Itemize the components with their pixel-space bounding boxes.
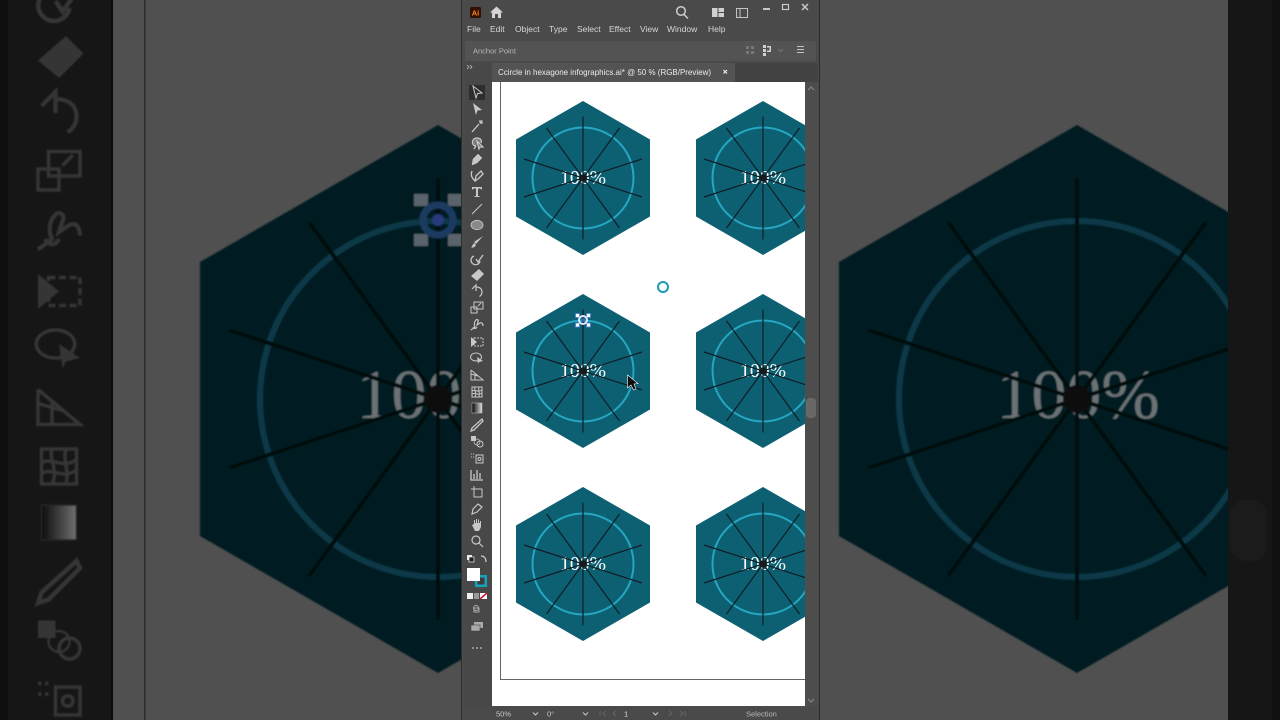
icon: zoom tool [472,536,483,547]
menu bar: Object [515,24,540,34]
icon: paintbrush tool [471,236,483,248]
selection handles on spoke [576,314,590,327]
left background: enlarged dimmed toolbar [36,0,84,715]
scrollbar arrows [808,87,814,702]
icon: perspective grid tool [471,370,483,380]
right background: enlarged dimmed hexagon: 100% [996,357,1160,434]
hexagon row 2 left [516,294,650,448]
icon: stroke swatch [475,575,487,587]
hexagon row 1 left [516,101,650,255]
toolbar panel [467,85,487,649]
icon: artboard tool [471,486,482,497]
icon: home [490,6,503,18]
hexagon row 2 right [696,294,805,448]
title bar icons [470,4,808,18]
menu bar: Effect [609,24,631,34]
status bar: Selection [746,710,777,718]
menu bar: File [467,24,481,34]
icon: eyedropper tool [471,419,483,431]
icon: app logo: Ai [472,8,479,18]
hexagon row 3 left: 100% [560,553,606,575]
icon: hand tool [472,519,481,531]
hexagon row 3 left [516,487,650,641]
hexagon row 1 right: 100% [740,167,786,189]
icon: selection tool [473,86,482,98]
status bar: 50% [496,710,511,718]
icon: blend tool [471,436,483,447]
icon: align dots [746,46,754,54]
icon: type tool [472,187,482,197]
status bar: 0° [547,710,554,718]
active tool highlight [469,85,485,100]
status bar: 1 [624,710,628,718]
menu bar: Help [708,24,726,34]
document tab: Ccircle in hexagone infographics.ai* @ 50 % (RGB/Preview) [498,67,711,77]
icon: default colors and swap [467,555,486,562]
canvas [492,82,814,706]
status bar [496,710,777,718]
icon: ellipse tool [471,220,483,230]
menu bar: Window [667,24,698,34]
icon: app logo [470,7,481,18]
document tab [492,63,735,82]
menu bar [467,24,726,34]
icon: anchor align [763,45,771,56]
icon: line tool [472,204,482,214]
icon: menu list [797,46,804,52]
hexagon row 1 right [696,101,805,255]
panel collapse marker [467,65,472,69]
icon: chevron [778,49,783,52]
icon: column graph tool [471,470,483,480]
hexagon row 3 right: 100% [740,553,786,575]
application window [461,0,820,720]
icon: screen mode [471,622,483,631]
menu bar: View [640,24,659,34]
hexagon row 3 right [696,487,805,641]
icon: workspace layout [712,8,724,17]
right background: enlarged dimmed hexagon [838,124,1228,674]
menu bar: Edit [490,24,505,34]
icon: magic wand tool [472,120,483,132]
icon: slice tool [472,504,482,514]
hexagon row 2 left: 100% [560,360,606,382]
hexagon row 2 right: 100% [740,360,786,382]
icon: lasso tool [472,138,483,149]
icon: more tools [472,647,482,649]
control bar: Anchor Point [473,46,517,56]
icon: free transform tool [471,337,483,347]
artwork: hexagon grid [516,101,830,641]
icon: shaper tool [471,255,483,265]
icon: curvature tool [471,171,483,181]
icon: color mode buttons [467,593,487,599]
icon: draw mode [474,606,479,612]
mouse cursor [628,375,638,390]
icon: scale tool [471,302,483,313]
left background: enlarged dimmed hexagon [199,124,461,674]
hexagon row 1 left: 100% [560,167,606,189]
menu bar: Select [577,24,601,34]
icon: rotate tool [472,285,482,296]
icon: pen tool [472,154,482,165]
left background: enlarged dimmed hexagon: 100% [356,357,520,434]
icon: mesh tool [472,387,482,397]
icon: symbol sprayer tool [471,454,483,463]
icon: gradient tool [472,403,482,413]
window controls [763,4,808,10]
icon: shape builder tool [470,353,483,364]
icon: direct selection tool [473,103,482,115]
icon: fill swatch [467,568,480,581]
menu bar: Type [549,24,568,34]
icon: panel layout [736,8,748,18]
icon: puppet warp tool [471,320,483,330]
icon: search [677,7,688,18]
click ring marker [658,282,668,292]
control bar [473,45,804,56]
icon: eraser tool [471,269,484,281]
